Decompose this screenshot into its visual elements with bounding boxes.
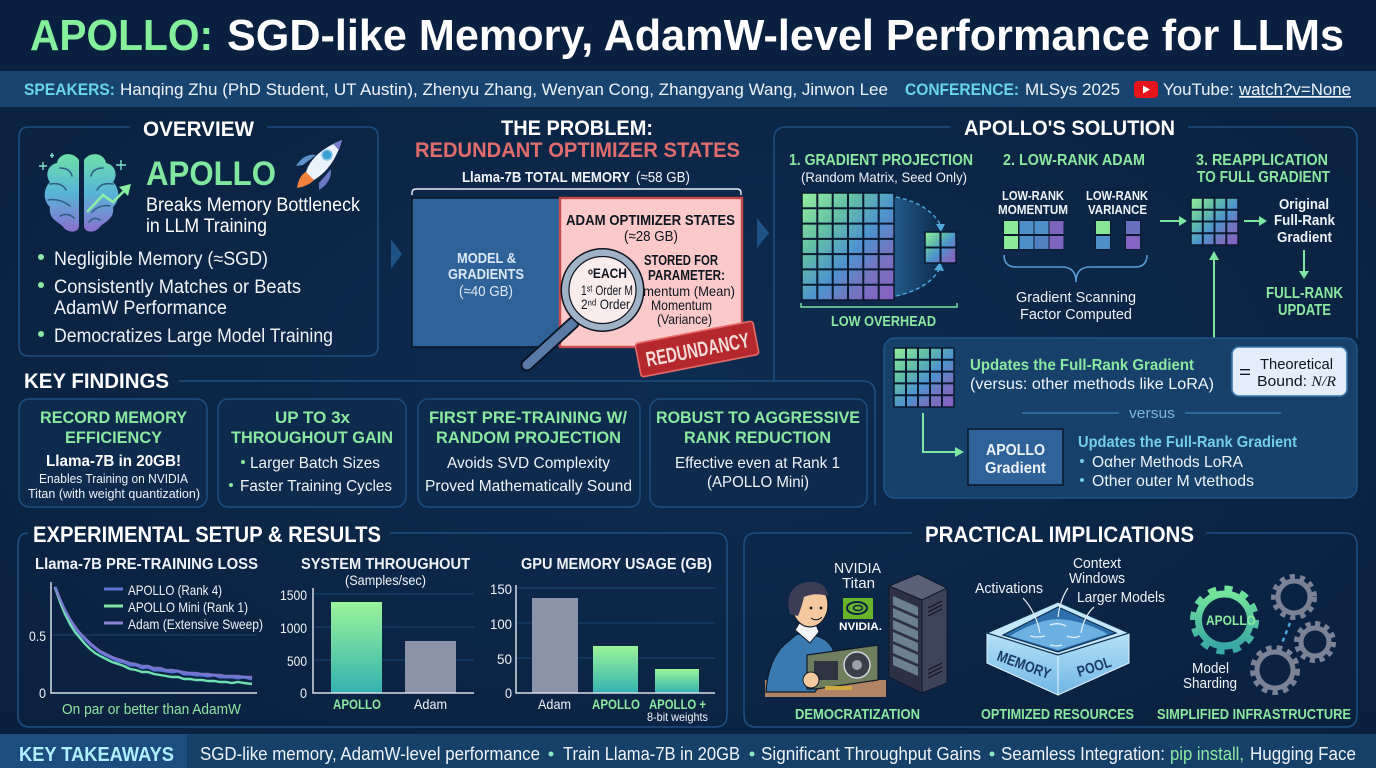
- tagline: in LLM Training: [146, 216, 267, 237]
- label: model sharding: Sharding: [1183, 676, 1237, 692]
- key takeaways bar: [0, 734, 1376, 768]
- card: record memory efficiency: RECORD MEMORY: [40, 408, 188, 427]
- label: nvidia titan: NVIDIA: [834, 560, 881, 577]
- chart: system throughput: Adam: [414, 696, 447, 712]
- step 2: low-rank adam: LOW-RANK: [1086, 188, 1149, 203]
- comparison box: [884, 338, 1357, 498]
- memory block: adam optimizer states: (≈28 GB): [624, 228, 678, 245]
- panel: overview: [19, 118, 378, 356]
- chart: gpu memory usage: 150: [490, 581, 512, 597]
- icon: full-rank matrix: [894, 348, 954, 407]
- illustration: gears: [1157, 577, 1351, 723]
- arrow: problem to solution: [757, 218, 769, 248]
- title: [0, 0, 1376, 71]
- text: other methods: [1078, 434, 1298, 490]
- key takeaways bar: Significant Throughput Gains: [761, 744, 981, 764]
- card: record memory efficiency: EFFICIENCY: [65, 428, 163, 447]
- step 3: reapplication to full gradient: 3. REAPPLICATION: [1196, 152, 1328, 169]
- chart: gpu memory usage: 8-bit weights: [647, 710, 708, 724]
- panel: practical implications: [744, 522, 1357, 727]
- arrow: up to reapplication: [1209, 251, 1219, 338]
- key takeaways bar: KEY TAKEAWAYS: [19, 744, 174, 766]
- memory block: adam optimizer states: ADAM OPTIMIZER STATES: [566, 212, 735, 229]
- key takeaways bar: SGD-like memory, AdamW-level performance: [200, 744, 540, 764]
- caption: optimized resources: OPTIMIZED RESOURCES: [981, 706, 1134, 723]
- card: aggressive rank reduction: RANK REDUCTION: [684, 428, 831, 447]
- card: random projection: RANDOM PROJECTION: [436, 428, 621, 447]
- illustration: gears: APOLLO: [1206, 612, 1256, 628]
- key takeaways bar: Train Llama-7B in 20GB: [563, 744, 740, 764]
- illustration: memory pool: POOL: [1075, 654, 1114, 681]
- chart: gpu memory usage: 50: [497, 651, 512, 667]
- apollo gradient box: APOLLO: [986, 442, 1045, 459]
- panel: experimental setup and results: [18, 522, 727, 727]
- step 3: reapplication to full gradient: [1191, 152, 1344, 319]
- memory block: adam optimizer states: PARAMETER:: [648, 267, 725, 284]
- speaker and conference bar: YouTube:: [1163, 80, 1234, 99]
- bullet list: Consistently Matches or Beats: [54, 277, 301, 298]
- chart: gpu memory usage: APOLLO +: [649, 696, 706, 712]
- speaker and conference bar: Hanqing Zhu (PhD Student, UT Austin), Zhenyu Zhang, Wenyan Cong, Zhangyang Wang, Jinwon Lee: [120, 80, 888, 99]
- card: record memory efficiency: Titan (with weight quantization): [28, 486, 200, 501]
- card: record memory efficiency: [19, 399, 207, 507]
- step 3: reapplication to full gradient: FULL-RANK: [1266, 285, 1344, 302]
- heading: the problem: [415, 117, 740, 162]
- chart: gpu memory usage: GPU MEMORY USAGE (GB): [521, 556, 712, 573]
- step 2: low-rank adam: 2. LOW-RANK ADAM: [1003, 152, 1145, 169]
- heading: key findings: KEY FINDINGS: [24, 370, 169, 393]
- card: random projection: Proved Mathematically Sound: [425, 478, 632, 495]
- memory block: model and gradients: (≈40 GB): [459, 283, 513, 300]
- label: nvidia titan: Titan: [842, 575, 875, 592]
- speaker and conference bar: watch?v=None: [1238, 80, 1351, 99]
- memory block: model and gradients: MODEL &: [457, 250, 516, 267]
- card: throughput gain: THROUGHOUT GAIN: [231, 428, 393, 447]
- chart: gpu memory usage: APOLLO: [592, 696, 640, 712]
- total memory label: [412, 169, 741, 195]
- icon: nvidia logo: [839, 598, 882, 633]
- icon: magnifying glass: [527, 249, 644, 365]
- chart: pre-training loss: APOLLO (Rank 4): [128, 582, 222, 598]
- callout: theoretical bound: =: [1239, 362, 1251, 382]
- label: model sharding: [1183, 661, 1237, 692]
- stamp: redundancy: REDUNDANCY: [644, 329, 752, 372]
- panel: the problem: [412, 117, 759, 377]
- step 1: gradient projection: (Random Matrix, Seed Only): [801, 169, 967, 185]
- memory block: model and gradients: [412, 198, 560, 347]
- memory block: adam optimizer states: (Variance): [657, 311, 712, 327]
- chart: pre-training loss: 0.5: [29, 628, 46, 644]
- chart: pre-training loss: Adam (Extensive Sweep): [128, 616, 263, 632]
- chart: system throughput: 1000: [280, 620, 307, 636]
- heading: the problem: REDUNDANT OPTIMIZER STATES: [415, 139, 740, 162]
- icon: brain with rising arrow: [39, 153, 131, 232]
- card: aggressive rank reduction: (APOLLO Mini): [707, 474, 809, 491]
- card: throughput gain: Faster Training Cycles: [240, 478, 392, 495]
- apollo gradient box: [968, 429, 1063, 485]
- bullet list: Negligible Memory (≈SGD): [54, 249, 268, 270]
- step 3: reapplication to full gradient: Original: [1279, 197, 1329, 213]
- text: other methods: Updates the Full-Rank Gradient: [1078, 434, 1298, 451]
- bullet list: Democratizes Large Model Training: [54, 326, 333, 347]
- card: throughput gain: Larger Batch Sizes: [250, 455, 380, 472]
- callout: theoretical bound: Bound: N/R: [1257, 373, 1336, 390]
- card: random projection: Avoids SVD Complexity: [447, 455, 610, 472]
- step 2: low-rank adam: MOMENTUM: [998, 202, 1068, 217]
- text: updates the full-rank gradient: [970, 357, 1214, 393]
- card: record memory efficiency: Llama-7B in 20GB!: [46, 453, 181, 470]
- step 3: reapplication to full gradient: UPDATE: [1278, 302, 1331, 319]
- labels: pool contents: Larger Models: [1077, 590, 1165, 606]
- chart: pre-training loss: Llama-7B PRE-TRAINING LOSS: [35, 556, 258, 573]
- speaker and conference bar: [0, 71, 1376, 107]
- apollo gradient box: Gradient: [985, 460, 1047, 477]
- step 3: reapplication to full gradient: Full-Rank: [1274, 213, 1336, 229]
- step 2: low-rank adam: [998, 152, 1149, 323]
- label: nvidia titan: [834, 560, 881, 592]
- step 2: low-rank adam: Factor Computed: [1020, 306, 1132, 323]
- illustration: memory pool: [975, 556, 1165, 723]
- heading: apollo's solution: APOLLO'S SOLUTION: [964, 117, 1175, 140]
- text: updates the full-rank gradient: (versus: other methods like LoRA): [970, 376, 1214, 393]
- memory block: adam optimizer states: Momentum: [651, 297, 712, 313]
- step 2: low-rank adam: Gradient Scanning: [1016, 289, 1136, 306]
- step 2: low-rank adam: LOW-RANK: [1002, 188, 1065, 203]
- callout: theoretical bound: Theoretical: [1260, 356, 1333, 373]
- key takeaways bar: Hugging Face: [1250, 744, 1356, 764]
- heading: experimental setup: EXPERIMENTAL SETUP & RESULTS: [33, 522, 381, 547]
- card: record memory efficiency: Enables Training on NVIDIA: [39, 471, 188, 486]
- divider: versus: versus: [1129, 405, 1175, 422]
- tagline: [146, 195, 360, 237]
- icon: magnifying glass: 2ⁿᵈ Order: [581, 296, 630, 312]
- title: SGD-like Memory, AdamW-level Performance for LLMs: [227, 11, 1344, 60]
- chart: gpu memory usage: 0: [505, 685, 512, 701]
- title: APOLLO:: [30, 11, 213, 60]
- memory block: adam optimizer states: [560, 198, 742, 347]
- step 3: reapplication to full gradient: TO FULL GRADIENT: [1197, 169, 1330, 186]
- labels: pool contents: [975, 556, 1165, 606]
- total memory label: (≈58 GB): [636, 169, 690, 186]
- heading: practical implications: PRACTICAL IMPLICATIONS: [925, 522, 1194, 547]
- step 3: reapplication to full gradient: Gradient: [1277, 230, 1332, 246]
- chart: gpu memory usage: Adam: [538, 696, 571, 712]
- icon: magnifying glass: 1ˢᵗ Order M: [581, 282, 633, 298]
- chart: system throughput: APOLLO: [333, 696, 381, 712]
- step 1: gradient projection: [789, 152, 973, 330]
- icon: magnifying glass: ᵒEACH: [588, 265, 627, 281]
- icon: nvidia logo: NVIDIA.: [839, 621, 882, 633]
- text: updates the full-rank gradient: Updates the Full-Rank Gradient: [970, 357, 1195, 374]
- labels: pool contents: Windows: [1069, 571, 1125, 587]
- panel: key findings: [19, 370, 875, 507]
- arrow: overview to problem: [391, 239, 402, 269]
- card: random projection: [418, 399, 640, 507]
- panel: apollo's solution: [774, 117, 1357, 498]
- heading: overview: OVERVIEW: [143, 118, 254, 141]
- card: throughput gain: UP TO 3x: [275, 408, 351, 427]
- card: aggressive rank reduction: ROBUST TO AGGRESSIVE: [656, 408, 860, 427]
- chart: pre-training loss: On par or better than AdamW: [62, 701, 242, 718]
- speaker and conference bar: CONFERENCE:: [905, 80, 1019, 99]
- chart: pre-training loss: 0: [39, 685, 46, 701]
- step 2: low-rank adam: VARIANCE: [1088, 202, 1147, 217]
- chart: system throughput: 0: [300, 685, 307, 701]
- step 1: gradient projection: 1. GRADIENT PROJECTION: [789, 152, 973, 169]
- memory block: adam optimizer states: Momentum (Mean): [625, 283, 735, 299]
- stamp: redundancy: [635, 321, 759, 377]
- speaker and conference bar: MLSys 2025: [1025, 80, 1120, 99]
- illustration: memory pool: MEMORY: [995, 648, 1053, 683]
- arrow: matrix to apollo gradient: [923, 413, 964, 457]
- key takeaways bar: Seamless Integration:: [1001, 744, 1165, 764]
- chart: system throughput: SYSTEM THROUGHOUT: [301, 556, 470, 573]
- chart: gpu memory usage: 100: [490, 616, 512, 632]
- memory block: adam optimizer states: STORED FOR: [644, 252, 718, 269]
- label: model sharding: Model: [1192, 661, 1229, 677]
- total memory label: Llama-7B TOTAL MEMORY: [462, 169, 630, 186]
- chart: gpu memory usage: [490, 556, 715, 724]
- labels: pool contents: Activations: [975, 581, 1043, 597]
- card: aggressive rank reduction: Effective even at Rank 1: [675, 455, 840, 472]
- card: throughput gain: [218, 399, 406, 507]
- bullet list: [38, 249, 333, 347]
- memory block: model and gradients: GRADIENTS: [448, 266, 524, 283]
- callout: theoretical bound: [1232, 347, 1347, 396]
- illustration: democratization: [765, 560, 947, 723]
- caption: democratization: DEMOCRATIZATION: [795, 706, 920, 723]
- speaker and conference bar: SPEAKERS:: [24, 80, 115, 99]
- icon: rocket: [296, 140, 342, 190]
- chart: system throughput: [280, 556, 474, 712]
- tagline: Breaks Memory Bottleneck: [146, 195, 360, 216]
- chart: pre-training loss: [29, 556, 263, 718]
- chart: pre-training loss: APOLLO Mini (Rank 1): [128, 599, 248, 615]
- heading: the problem: THE PROBLEM:: [501, 117, 653, 140]
- text: other methods: Oαher Methods LoRA: [1092, 454, 1243, 471]
- icon: server rack: [889, 574, 947, 693]
- labels: pool contents: Context: [1073, 556, 1121, 572]
- card: random projection: FIRST PRE-TRAINING W/: [429, 408, 627, 427]
- text: other methods: Other outer M vtethods: [1092, 473, 1254, 490]
- arrow: low-rank adam to reapplication: [1160, 216, 1187, 226]
- chart: system throughput: 500: [287, 653, 307, 669]
- card: aggressive rank reduction: [650, 399, 867, 507]
- brand name: APOLLO: [146, 155, 276, 193]
- chart: system throughput: (Samples/sec): [345, 573, 426, 588]
- chart: system throughput: 1500: [280, 587, 307, 603]
- key takeaways bar: pip install,: [1170, 744, 1244, 764]
- step 1: gradient projection: LOW OVERHEAD: [831, 314, 936, 330]
- bullet list: AdamW Performance: [54, 298, 227, 319]
